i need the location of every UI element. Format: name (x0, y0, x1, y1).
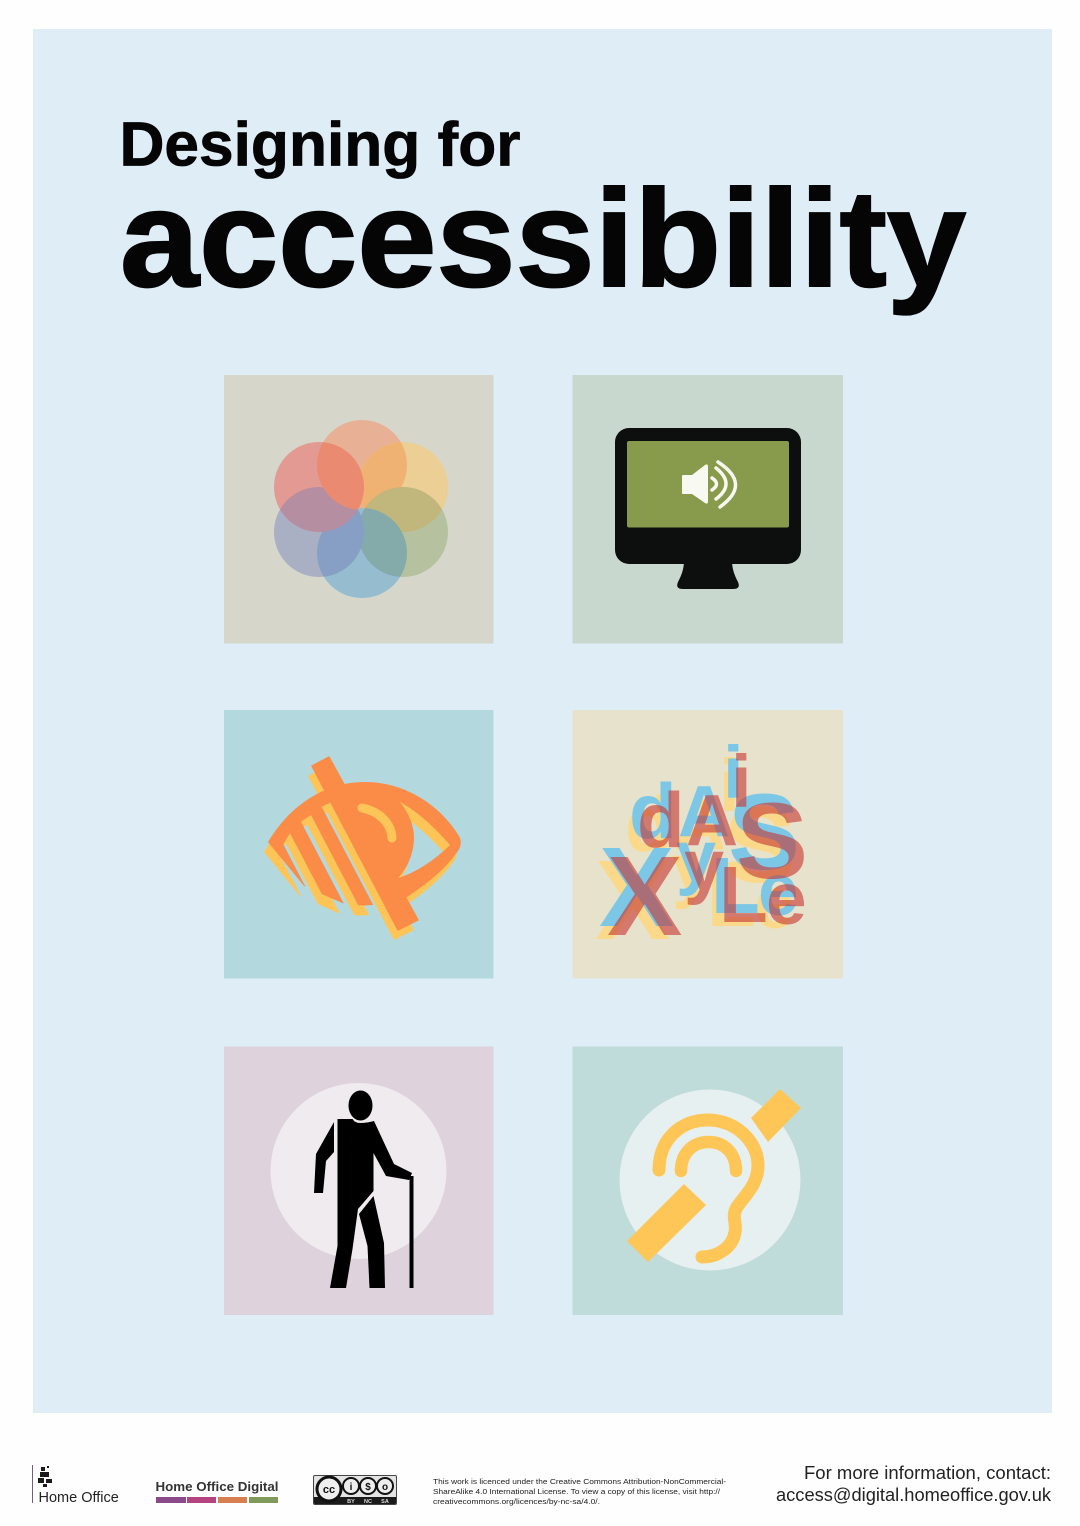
icon: person with walking stick (314, 1090, 414, 1288)
red letter layer: S (736, 780, 808, 901)
panel: screen reader tile (572, 375, 843, 644)
footer: licence text: This work is licenced under the Creative Commons Attribution-NonCommercial- (433, 1477, 727, 1486)
red letter layer: i (731, 740, 752, 823)
footer: licence text: creativecommons.org/licences/by-nc-sa/4.0/. (433, 1497, 600, 1506)
footer: Home Office Digital logo (156, 1479, 278, 1503)
footer: Home Office logo (32, 1465, 119, 1506)
yellow letter layer: L (707, 854, 756, 943)
blue letter layer: S (728, 771, 800, 892)
blue letter layer: L (711, 841, 760, 930)
footer: Home Office logo: Home Office (38, 1490, 119, 1506)
yellow letter layer: d (625, 780, 673, 868)
blue letter layer (599, 731, 800, 950)
footer: contact details: access@digital.homeoffice.gov.uk (776, 1485, 1052, 1505)
icon: crossed out eye (264, 757, 461, 940)
footer: Home Office Digital logo: Home Office Digital (156, 1479, 278, 1494)
title: Designing for (120, 110, 520, 180)
panel: low vision tile (224, 710, 494, 978)
yellow letter layer: i (719, 744, 740, 827)
blue letter layer: d (629, 767, 677, 855)
blue letter layer: i (723, 731, 744, 814)
yellow letter layer (595, 744, 796, 963)
red letter layer: d (637, 776, 685, 864)
footer: Creative Commons badge: cc (323, 1484, 335, 1496)
icon: scattered dyslexia letters (595, 731, 808, 963)
footer: Creative Commons badge: BY (347, 1499, 355, 1505)
footer: Creative Commons badge (314, 1476, 396, 1505)
footer: Creative Commons badge: NC (364, 1499, 372, 1505)
icon: overlapping colour circles (274, 420, 448, 598)
icon: monitor with speaker (615, 428, 801, 589)
yellow letter layer: e (754, 863, 795, 944)
footer: Creative Commons badge: SA (381, 1499, 389, 1505)
red letter layer (607, 740, 808, 959)
red letter layer: e (766, 859, 807, 940)
icon: crest (38, 1466, 52, 1487)
panel: dyslexia tile (572, 710, 843, 978)
blue letter layer: X (599, 824, 674, 950)
icon: circle backdrop (270, 1083, 446, 1259)
blue letter layer: A (678, 772, 730, 852)
footer: Creative Commons badge: o (382, 1482, 388, 1493)
footer: contact details: For more information, contact: (804, 1463, 1051, 1483)
icon: crossed out ear (627, 1089, 801, 1262)
icon: circle backdrop (620, 1090, 800, 1270)
footer: contact details (776, 1463, 1052, 1505)
yellow letter layer: S (724, 784, 796, 905)
yellow letter layer: A (674, 785, 726, 865)
yellow letter layer: y (672, 830, 712, 910)
footer: licence text (433, 1477, 727, 1506)
panel: colour contrast tile (224, 375, 494, 644)
red letter layer: X (607, 833, 682, 959)
footer: Creative Commons badge: i (350, 1482, 353, 1493)
footer: licence text: ShareAlike 4.0 International License. To view a copy of this license, visit http:// (433, 1487, 721, 1496)
yellow letter layer: X (595, 837, 670, 963)
panel: hearing tile (572, 1046, 843, 1315)
blue letter layer: y (676, 817, 716, 897)
panel: mobility tile (224, 1046, 494, 1315)
red letter layer: L (719, 850, 768, 939)
red letter layer: y (684, 826, 724, 906)
footer: Creative Commons badge: $ (365, 1482, 371, 1493)
red letter layer: A (686, 781, 738, 861)
title: accessibility (120, 162, 966, 316)
blue letter layer: e (758, 850, 799, 931)
